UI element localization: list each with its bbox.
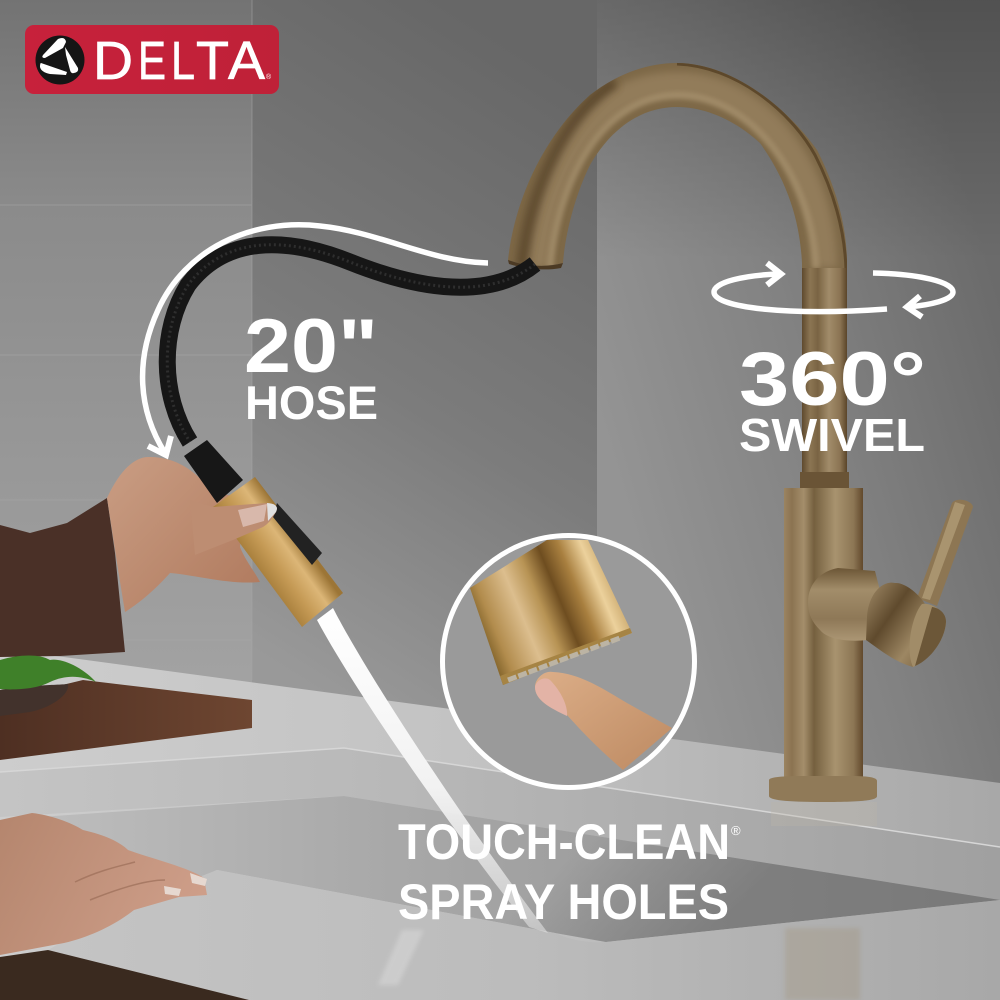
arrow: hose length [143,225,488,455]
callout: touch-clean magnifier [440,536,700,790]
faucet column [802,268,847,472]
water stream [317,608,548,933]
logo wordmark: T [196,31,229,91]
logo wordmark [93,31,272,91]
faucet spout [500,55,850,275]
heading: 20 inch hose: 20" [244,304,378,389]
logo wordmark: D [93,31,133,91]
thumb over spray head [190,500,277,555]
heading: 360 degree swivel [739,337,926,461]
spray head [184,440,343,627]
heading: 360 degree swivel: SWIVEL [739,409,925,461]
icon: Delta logo mark [36,36,84,84]
lower hand on sink [0,813,207,955]
logo wordmark: A [228,31,265,91]
front counter [48,870,1000,1000]
heading: touch-clean spray holes: ® [731,823,741,838]
pull-out hose [167,245,535,442]
heading: touch-clean spray holes [398,814,741,930]
faucet body [784,488,863,782]
logo: Delta badge [25,25,279,94]
sink basin [40,796,1000,942]
sweater arm and hand [0,457,260,657]
logo wordmark: E [138,31,166,91]
faucet [500,55,973,826]
logo wordmark: L [171,31,195,91]
arrows: swivel rotation [714,263,953,317]
heading: touch-clean spray holes: TOUCH-CLEAN [398,814,730,870]
heading: 20 inch hose: HOSE [245,376,378,429]
logo wordmark: ® [266,73,272,81]
heading: touch-clean spray holes: SPRAY HOLES [398,874,729,930]
heading: 20 inch hose [244,304,378,429]
faucet base [769,776,877,826]
faucet handle [808,500,973,667]
cutting board and pepper [0,656,252,760]
heading: 360 degree swivel: 360° [739,337,926,422]
